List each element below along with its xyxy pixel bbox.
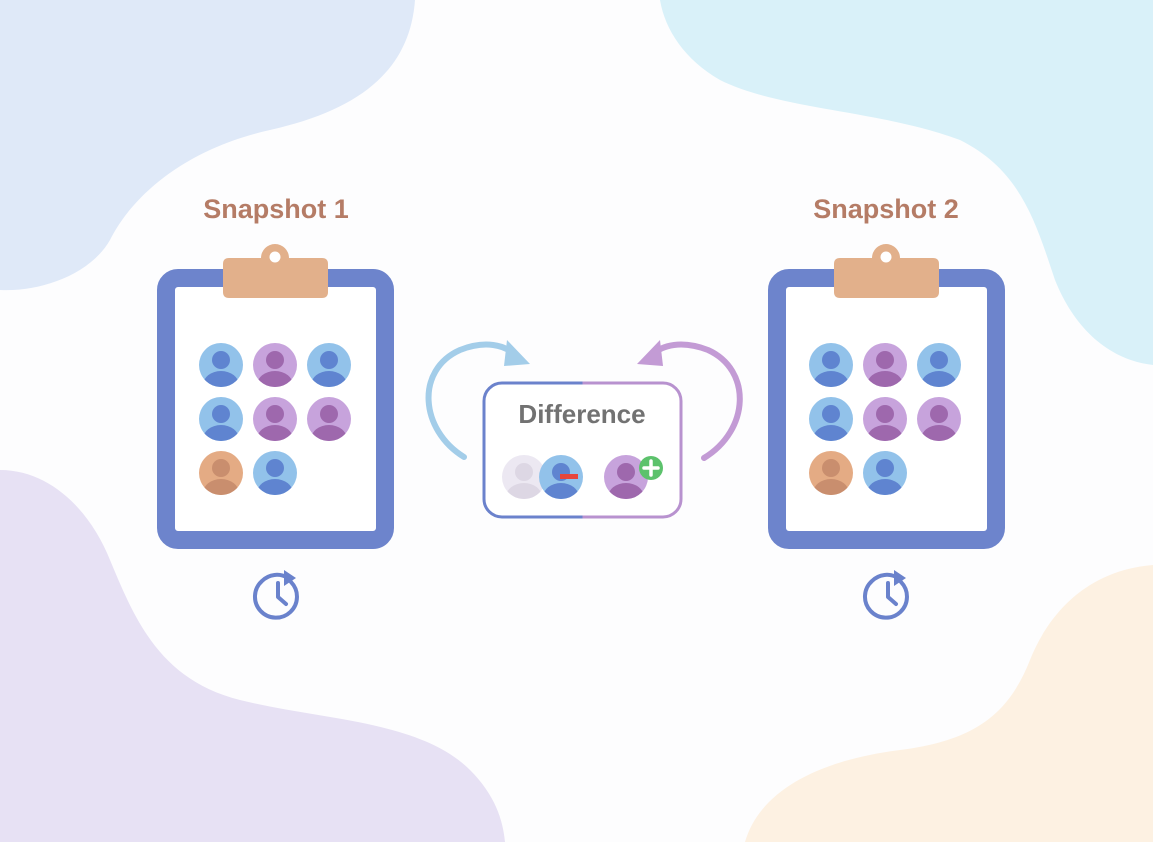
heading: Snapshot 2: Snapshot 2: [813, 194, 959, 224]
clipboard: snapshot 2: [777, 244, 996, 540]
arrow: snapshot 2 to difference: [637, 340, 740, 458]
background blob: bottom-left: [0, 470, 505, 842]
text: Difference: Difference: [518, 399, 646, 429]
background blob: bottom-right: [745, 565, 1153, 842]
arrow: snapshot 1 to difference: [429, 340, 530, 457]
icon: clock history 2: [865, 570, 907, 618]
panel: difference: [484, 383, 681, 517]
icon: clock history 1: [255, 570, 297, 618]
avatar grid 1: [199, 343, 351, 507]
avatar: added: [604, 455, 663, 511]
background blob: top-right: [660, 0, 1153, 365]
clipboard: snapshot 1: [166, 244, 385, 540]
avatar: removed: [502, 455, 583, 511]
avatar grid 2: [809, 343, 961, 507]
heading: Snapshot 1: Snapshot 1: [203, 194, 349, 224]
background blob: top-left: [0, 0, 415, 290]
